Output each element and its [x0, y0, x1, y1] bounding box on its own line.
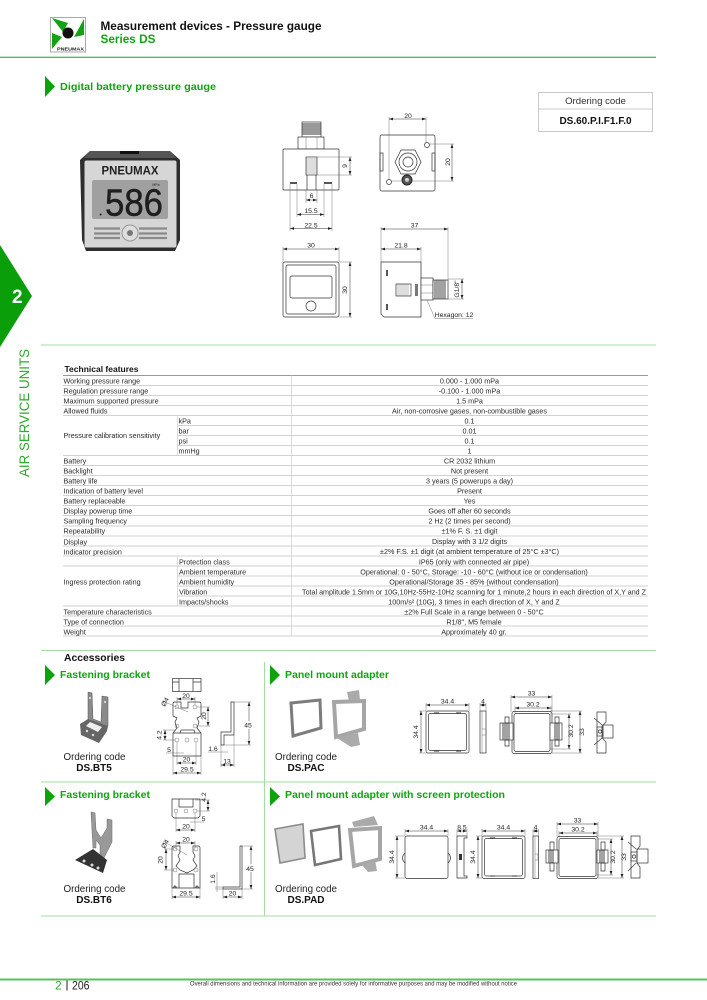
ordering code: Ordering code — [275, 884, 337, 895]
drawing: side view with dimensions: 37 — [411, 222, 418, 230]
ordering code box: Ordering code — [565, 96, 626, 107]
sidebar label: AIR SERVICE UNITS — [17, 349, 33, 477]
drawing: front view with dimensions: 15.5 — [304, 208, 318, 215]
row — [64, 608, 544, 617]
product photo: digital gauge — [80, 151, 180, 251]
drawing: rear view with dimensions: 20 — [404, 113, 412, 120]
product photo: digital gauge: PNEUMAX — [102, 166, 159, 178]
page number: 2 — [55, 978, 62, 992]
row group: ingress protection rating: Operational/Storage 35 - 85% (without condensation) — [389, 578, 559, 586]
row — [64, 486, 482, 496]
row: Indicator precision — [64, 548, 122, 556]
drawing: adapter end view — [628, 836, 648, 878]
drawing: adapter with clips: 30.2 — [526, 702, 540, 708]
row — [64, 618, 502, 627]
drawing: rear view with dimensions: 20 — [445, 158, 452, 166]
drawing: bracket front view — [156, 693, 210, 775]
row: Battery replaceable — [64, 496, 125, 506]
drawing: rear view with dimensions — [380, 113, 454, 191]
row: Air, non-corrosive gases, non-combustible gases — [392, 406, 547, 416]
row group: pressure calibration sensitivity: bar — [178, 426, 189, 436]
row: Sampling frequency — [64, 516, 127, 526]
row: Battery life — [64, 476, 97, 486]
row group: ingress protection rating: IP65 (only with connected air pipe) — [419, 558, 529, 566]
drawing: adapter with clips: 30.2 — [568, 724, 575, 738]
photo: bracket — [75, 812, 112, 873]
row: Working pressure range — [64, 376, 140, 386]
row group: pressure calibration sensitivity: mmHg — [178, 446, 200, 456]
row: Display powerup time — [64, 506, 132, 516]
row group: pressure calibration sensitivity: 1 — [468, 446, 472, 456]
photo: frame and clip — [291, 690, 364, 747]
row: Display with 3 1/2 digits — [432, 537, 507, 546]
row: ±2% Full Scale in a range between 0 - 50°C — [404, 608, 544, 617]
row — [64, 456, 495, 466]
drawing: bracket side view: 20 — [229, 890, 236, 898]
drawing: front display view with dimensions: 30 — [307, 242, 315, 250]
row: Indication of battery level — [64, 486, 143, 496]
panel: fastening bracket DS.BT5 — [45, 665, 255, 775]
row — [64, 516, 511, 526]
footnote: Overall dimensions and technical information are provided solely for informative purposes and may be modified without notice — [190, 982, 518, 988]
section heading: Digital battery pressure gauge — [45, 76, 216, 97]
row: R1/8", M5 female — [446, 618, 502, 627]
header title — [100, 19, 322, 46]
drawing: bracket front view: 5 — [167, 747, 171, 754]
drawing: adapter side: 4 — [534, 824, 538, 832]
row group: ingress protection rating: Vibration — [179, 588, 207, 596]
row group: pressure calibration sensitivity: 0.01 — [462, 426, 476, 436]
row: Approximately 40 gr. — [441, 628, 507, 637]
row: Battery — [64, 456, 87, 466]
heading: Fastening bracket — [60, 670, 151, 681]
drawing: adapter front: 34.4 — [470, 850, 477, 864]
ordering code: DS.PAD — [287, 895, 325, 906]
drawing: bracket top view — [172, 678, 201, 692]
row — [64, 526, 497, 536]
row group: pressure calibration sensitivity: Pressure calibration sensitivity — [64, 431, 161, 440]
drawing: cover front: 34.4 — [389, 850, 396, 864]
drawing: cover side — [457, 824, 467, 878]
row — [64, 406, 547, 416]
row group: ingress protection rating: Impacts/shocks — [179, 598, 229, 606]
drawing: side view with dimensions — [381, 222, 473, 319]
row — [64, 396, 483, 406]
logo: Pneumax — [50, 18, 86, 52]
drawing: adapter side: 4 — [481, 698, 485, 706]
row: 2 Hz (2 times per second) — [428, 516, 511, 526]
row — [64, 628, 507, 637]
heading — [270, 787, 505, 806]
row: Type of connection — [64, 618, 124, 627]
table heading: Technical features — [64, 364, 139, 374]
drawing: adapter with clips: 33 — [621, 853, 628, 861]
row — [64, 376, 499, 386]
drawing: bracket front view: 20 — [158, 856, 164, 864]
drawing: bracket side view: 13 — [223, 758, 231, 766]
sidebar tab: chapter 2: 2 — [12, 287, 23, 308]
row: 1.5 mPa — [456, 396, 483, 406]
ordering code box — [538, 92, 652, 132]
drawing: bracket side view: 45 — [244, 722, 252, 730]
row — [64, 386, 500, 396]
drawing: bracket front view: 20 — [182, 693, 190, 700]
ordering code: DS.PAC — [287, 763, 325, 774]
ordering code box: DS.60.P.I.F1.F.0 — [559, 116, 632, 127]
row: CR 2032 lithium — [444, 456, 495, 466]
row group: pressure calibration sensitivity: 0.1 — [464, 436, 474, 446]
drawing: bracket top view: 20 — [182, 824, 190, 830]
sidebar tab: chapter 2 — [0, 245, 32, 347]
header title: Measurement devices - Pressure gauge — [100, 19, 322, 33]
drawing: adapter with clips: 33 — [528, 690, 535, 698]
ordering code: DS.BT6 — [76, 895, 112, 906]
row group: pressure calibration sensitivity: kPa — [178, 416, 191, 426]
row — [64, 496, 476, 506]
drawing: bracket front view: 29.5 — [179, 890, 193, 898]
drawing: adapter with clips: 30.2 — [610, 850, 617, 864]
drawing: bracket front view: Ø4 — [160, 696, 171, 708]
drawing: bracket front view — [158, 836, 200, 899]
row: Goes off after 60 seconds — [428, 506, 511, 516]
header title: Series DS — [100, 32, 156, 46]
drawing: adapter front: 34.4 — [497, 824, 510, 832]
drawing: adapter with clips — [546, 818, 628, 878]
panel: fastening bracket DS.BT6 — [45, 787, 257, 906]
row group: pressure calibration sensitivity: 0.1 — [464, 416, 474, 426]
ordering code: Ordering code — [64, 884, 126, 895]
drawing: bracket front view: 29.5 — [180, 766, 194, 774]
drawing: side view with dimensions: 21.8 — [394, 242, 408, 250]
heading: Panel mount adapter with screen protection — [285, 790, 505, 801]
heading — [45, 665, 151, 685]
row — [64, 537, 507, 546]
heading — [45, 787, 151, 806]
drawing: front view with dimensions — [283, 122, 352, 231]
drawing: adapter with clips: 33 — [574, 818, 581, 824]
ordering code — [275, 884, 337, 906]
row group: ingress protection rating: Operational: 0 - 50°C, Storage: -10 - 60°C (without ice or condensation) — [360, 568, 588, 576]
drawing: bracket side view — [208, 702, 255, 767]
row — [64, 547, 559, 556]
logo: Pneumax: PNEUMAX — [57, 46, 85, 52]
page number: 206 — [72, 978, 90, 992]
drawing: side view with dimensions: G1/8" — [454, 280, 461, 298]
ordering code: Ordering code — [275, 752, 337, 763]
drawing: cover front: 34.4 — [420, 824, 433, 832]
drawing: adapter front: 34.4 — [413, 725, 420, 739]
drawing: bracket front view: 20 — [182, 836, 190, 844]
ordering code — [64, 752, 126, 774]
drawing: bracket front view: 4.2 — [156, 730, 164, 740]
row group: ingress protection rating: 100m/s² (10G), 3 times in each direction of X, Y and Z — [388, 598, 560, 606]
row group: ingress protection rating: Protection class — [179, 558, 230, 566]
drawing: bracket side view: 1.6 — [208, 746, 218, 753]
drawing: cover front — [389, 824, 450, 878]
heading: Fastening bracket — [60, 790, 151, 801]
row — [64, 466, 488, 476]
drawing: adapter front — [470, 824, 525, 878]
drawing: front view with dimensions: 22.5 — [304, 222, 318, 230]
row group: pressure calibration sensitivity — [64, 416, 476, 456]
drawing: adapter front: 34.4 — [441, 698, 454, 706]
drawing: adapter side — [480, 698, 486, 753]
drawing: bracket side view: 45 — [246, 866, 254, 873]
row: Weight — [64, 628, 86, 637]
photo: plate, frame and clip — [275, 816, 380, 872]
panel: panel mount adapter with screen protection DS.PAD — [270, 787, 648, 906]
heading: Panel mount adapter — [285, 670, 389, 681]
row: Not present — [451, 466, 488, 476]
drawing: adapter end view — [594, 712, 613, 753]
product photo: digital gauge: 586 — [105, 182, 163, 224]
drawing: adapter with clips: 33 — [579, 728, 586, 736]
ordering code: DS.BT5 — [76, 763, 112, 774]
drawing: adapter front — [413, 698, 469, 753]
row group: ingress protection rating: Ambient temperature — [179, 568, 246, 576]
row: Temperature characteristics — [64, 608, 152, 617]
row group: pressure calibration sensitivity: psi — [178, 436, 188, 446]
row group: ingress protection rating — [64, 558, 647, 606]
drawing: bracket front view: Ø4 — [160, 838, 171, 850]
heading — [270, 665, 389, 685]
section heading: Digital battery pressure gauge: Digital battery pressure gauge — [60, 82, 216, 93]
row: Maximum supported pressure — [64, 396, 159, 406]
row: Present — [457, 486, 482, 496]
row: Allowed fluids — [64, 406, 108, 416]
row — [64, 476, 513, 486]
drawing: front display view with dimensions — [283, 242, 352, 317]
panel: panel mount adapter DS.PAC — [270, 665, 613, 774]
row: Display — [64, 538, 87, 546]
row: -0.100 - 1.000 mPa — [439, 386, 500, 396]
drawing: bracket front view: 20 — [183, 756, 190, 764]
row: Regulation pressure range — [64, 386, 148, 396]
row: ±2% F.S. ±1 digit (at ambient temperature of 25°C ±3°C) — [380, 547, 559, 556]
page number — [55, 978, 90, 992]
row: Backlight — [64, 466, 93, 476]
drawing: adapter with clips — [500, 690, 586, 754]
drawing: adapter side — [533, 824, 538, 878]
drawing: bracket side view — [210, 846, 257, 899]
row: 0.000 - 1.000 mPa — [440, 376, 499, 386]
drawing: bracket side view: 1.6 — [210, 874, 217, 884]
ordering code — [275, 752, 337, 774]
drawing: bracket top view — [172, 792, 210, 832]
photo: bracket — [80, 692, 108, 743]
accessories heading: Accessories — [64, 652, 125, 664]
row: Repeatability — [64, 526, 105, 536]
table: technical features — [63, 364, 648, 637]
row — [64, 506, 511, 516]
row: Yes — [464, 496, 476, 506]
drawing: bracket top view: 4.2 — [201, 792, 208, 802]
drawing: cover side: 8.5 — [457, 824, 467, 832]
drawing: front view with dimensions: 9 — [342, 164, 349, 168]
ordering code — [64, 884, 126, 906]
drawing: side view with dimensions: Hexagon: 12 — [435, 312, 473, 319]
row: 3 years (5 powerups a day) — [426, 476, 513, 486]
row group: ingress protection rating: Ambient humidity — [179, 578, 235, 586]
row: ±1% F. S. ±1 digit — [442, 526, 497, 536]
drawing: adapter with clips: 30.2 — [571, 826, 585, 834]
row group: ingress protection rating: Ingress protection rating — [64, 578, 141, 586]
drawing: bracket top view: 5 — [202, 816, 206, 823]
drawing: front view with dimensions: 6 — [310, 193, 314, 200]
ordering code: Ordering code — [64, 752, 126, 763]
drawing: front display view with dimensions: 30 — [342, 286, 349, 294]
drawing: bracket front view: 20 — [201, 712, 208, 720]
row group: ingress protection rating: Total amplitude 1.5mm or 10G,10Hz-55Hz-10Hz scanning for 1 minute,2 hours in each direction of X,Y and Z — [302, 588, 647, 596]
product photo: digital gauge: MPa — [152, 183, 160, 187]
